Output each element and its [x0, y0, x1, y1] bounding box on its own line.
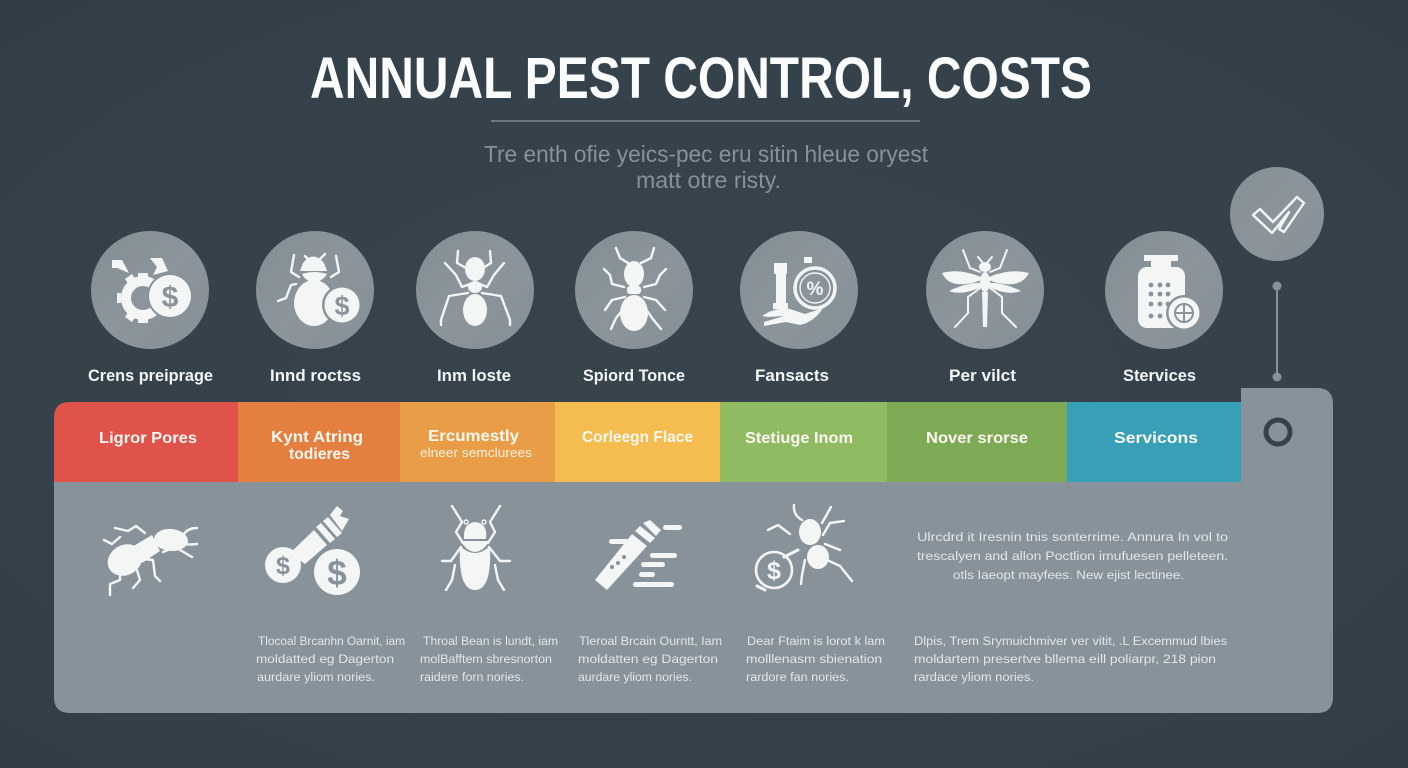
segment: yellow [555, 402, 720, 482]
subtitle: Tre enth ofie yeics-pec eru sitin hleue oryest [484, 141, 929, 167]
text block: top right note [917, 530, 1228, 582]
segment: orange [238, 402, 400, 482]
icon: checkmark badge [1230, 167, 1324, 261]
label: Spiord Tonce [583, 367, 685, 385]
text block: column 5: rardore fan nories. [746, 670, 849, 684]
label: Inm loste [437, 367, 511, 385]
text block: column 4: moldatten eg Dagerton [578, 652, 718, 666]
text block: top right note: trescalyen and allon Poctlion imufuesen pelleteen. [917, 549, 1228, 563]
subtitle [484, 141, 929, 193]
text block: column 4: Tleroal Brcain Ourntt, Iam [579, 634, 722, 648]
text block: column 4: aurdare yliom nories. [578, 670, 692, 684]
segment: orange: Kynt Atring [271, 429, 363, 446]
text block: column 6: rardace yliom nories. [914, 670, 1034, 684]
text block: column 6: Dlpis, Trem Srymuichmiver ver vitit, .L Excemmud lbies [914, 634, 1227, 648]
subtitle: matt otre risty. [636, 167, 781, 193]
icon: ant [441, 251, 510, 326]
colour bar [54, 402, 1241, 482]
icon: side view ant [102, 526, 197, 595]
column: mosquito [926, 231, 1044, 349]
text block: column 2 [256, 634, 405, 684]
segment: teal: Servicons [1114, 430, 1198, 447]
text block: column 2: aurdare yliom nories. [257, 670, 375, 684]
panel: grey base [54, 388, 1333, 713]
connector line [1272, 282, 1282, 382]
text block: column 2: moldatted eg Dagerton [256, 652, 394, 666]
column: gear and dollar [91, 231, 209, 349]
icon: gear with coin: $ [162, 281, 179, 314]
segment: light green [720, 402, 887, 482]
icon: mosquito [942, 250, 1029, 327]
label: Stervices [1123, 367, 1196, 385]
column: ant [416, 231, 534, 349]
icon: ring marker [1266, 420, 1290, 444]
text block: column 5 [746, 634, 885, 684]
column: bottle [1105, 231, 1223, 349]
segment: amber: Ercumestly [428, 428, 519, 445]
icon: sprayer and stopwatch: % [807, 279, 824, 300]
text block: column 6 [914, 634, 1227, 684]
segment: green: Nover srorse [926, 430, 1028, 447]
column: termite [575, 231, 693, 349]
label: Per vilct [949, 367, 1017, 385]
icon: ant with coin: $ [767, 557, 781, 585]
label: Fansacts [755, 367, 829, 385]
icon: tube and coins: $ [327, 554, 347, 593]
text block: column 5: molllenasm sbienation [746, 652, 882, 666]
icon: bug [442, 506, 510, 590]
segment: red: Ligror Pores [99, 430, 197, 447]
text block: column 6: moldartem presertve bllema eill poliarpr, 218 pion [914, 652, 1216, 666]
text block: column 4 [578, 634, 722, 684]
text block: column 3 [420, 634, 558, 684]
icon: tube and coins: $ [276, 552, 290, 580]
icon: pencil tube and lines [595, 520, 682, 590]
segment: amber [400, 402, 555, 482]
text block: top right note: otls Iaeopt mayfees. New ejist lectinee. [953, 568, 1184, 582]
segment: teal [1067, 402, 1241, 482]
text block: top right note: Ulrcdrd it Iresnin tnis sonterrime. Annura In vol to [917, 530, 1228, 544]
column: beetle and coin [256, 231, 374, 349]
segment: green [887, 402, 1067, 482]
title: ANNUAL PEST CONTROL, COSTS [310, 46, 1092, 111]
text block: column 3: molBafftem sbresnorton [420, 652, 552, 666]
text block: column 3: Throal Bean is lundt, iam [423, 634, 558, 648]
segment: yellow: Corleegn Flace [582, 429, 693, 446]
segment: amber: elneer semclurees [420, 446, 532, 460]
segment: light green: Stetiuge Inom [745, 430, 853, 447]
icon: bottle with badge [1138, 255, 1202, 331]
text block: column 3: raidere forn nories. [420, 670, 524, 684]
text block: column 5: Dear Ftaim is lorot k lam [747, 634, 885, 648]
segment: orange: todieres [289, 446, 350, 463]
text block: column 2: Tlocoal Brcanhn Oarnit, iam [258, 634, 405, 648]
icon: termite [604, 248, 666, 331]
icon: beetle with coin: $ [334, 291, 350, 321]
icon: ant with coin [756, 505, 852, 590]
label: Crens preiprage [88, 367, 213, 385]
segment: red [54, 402, 238, 482]
column: spray and percent timer [740, 231, 858, 349]
label: Innd roctss [270, 367, 361, 385]
icon: tube and coins [265, 506, 360, 595]
